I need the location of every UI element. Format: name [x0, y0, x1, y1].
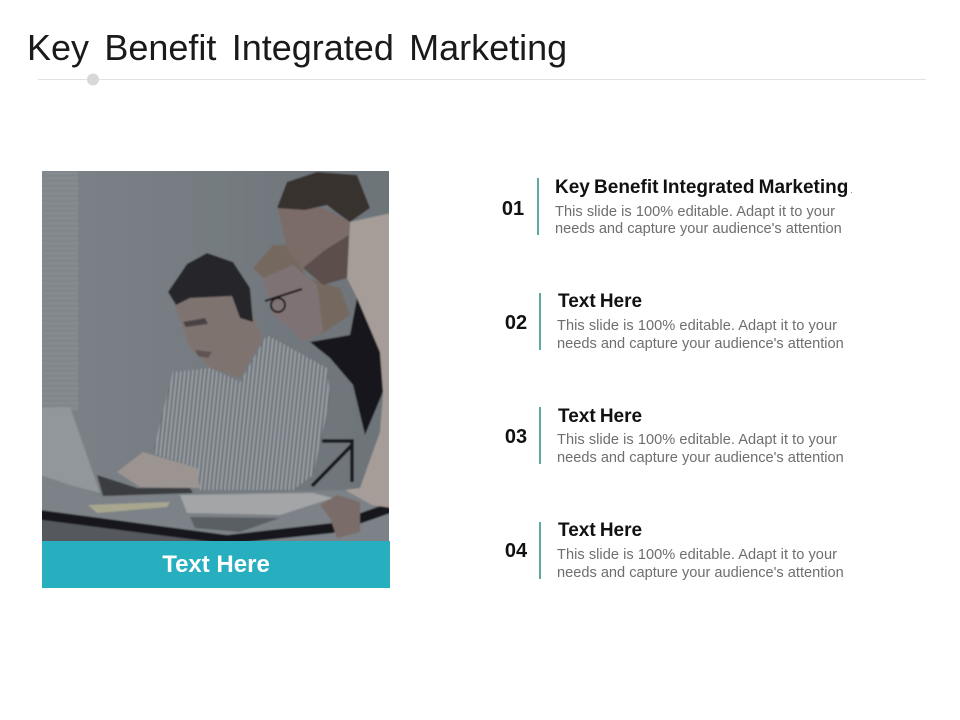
- item 04: This slide is 100% editable. Adapt it to your: [557, 547, 837, 563]
- item 03: This slide is 100% editable. Adapt it to your: [557, 432, 837, 448]
- standing man: [276, 172, 389, 538]
- item 04: 04: [505, 540, 528, 562]
- item 02: 02: [505, 312, 527, 334]
- item 01: This slide is 100% editable. Adapt it to your: [555, 204, 835, 220]
- item 02: [505, 291, 844, 352]
- item 01: needs and capture your audience's attention: [555, 221, 842, 237]
- caption bar: Text Here: [162, 551, 270, 578]
- title rule with dot: [38, 74, 926, 86]
- item 03: [505, 406, 844, 466]
- seated man: [117, 253, 330, 490]
- laptop: [42, 408, 193, 496]
- table: [42, 490, 389, 541]
- photo: three colleagues at a laptop: [42, 171, 389, 541]
- item 02: needs and capture your audience's attention: [557, 336, 844, 352]
- woman with glasses: [253, 245, 350, 342]
- caption bar: [42, 541, 390, 588]
- title: Key Benefit Integrated Marketing: [27, 27, 567, 68]
- item 03: needs and capture your audience's attention: [557, 450, 844, 466]
- window blinds: [42, 172, 78, 410]
- item 03: 03: [505, 426, 527, 448]
- item 02: Text Here: [558, 291, 642, 312]
- item 04: needs and capture your audience's attention: [557, 565, 844, 581]
- item 03: Text Here: [558, 406, 642, 427]
- item 01: 01: [502, 198, 524, 220]
- item 01: .: [850, 185, 853, 196]
- item 02: This slide is 100% editable. Adapt it to your: [557, 318, 837, 334]
- item 01: Key Benefit Integrated Marketing: [555, 177, 848, 198]
- item 01: [502, 177, 853, 237]
- item 04: Text Here: [558, 520, 642, 541]
- item 04: [505, 520, 844, 581]
- chair: [312, 441, 352, 486]
